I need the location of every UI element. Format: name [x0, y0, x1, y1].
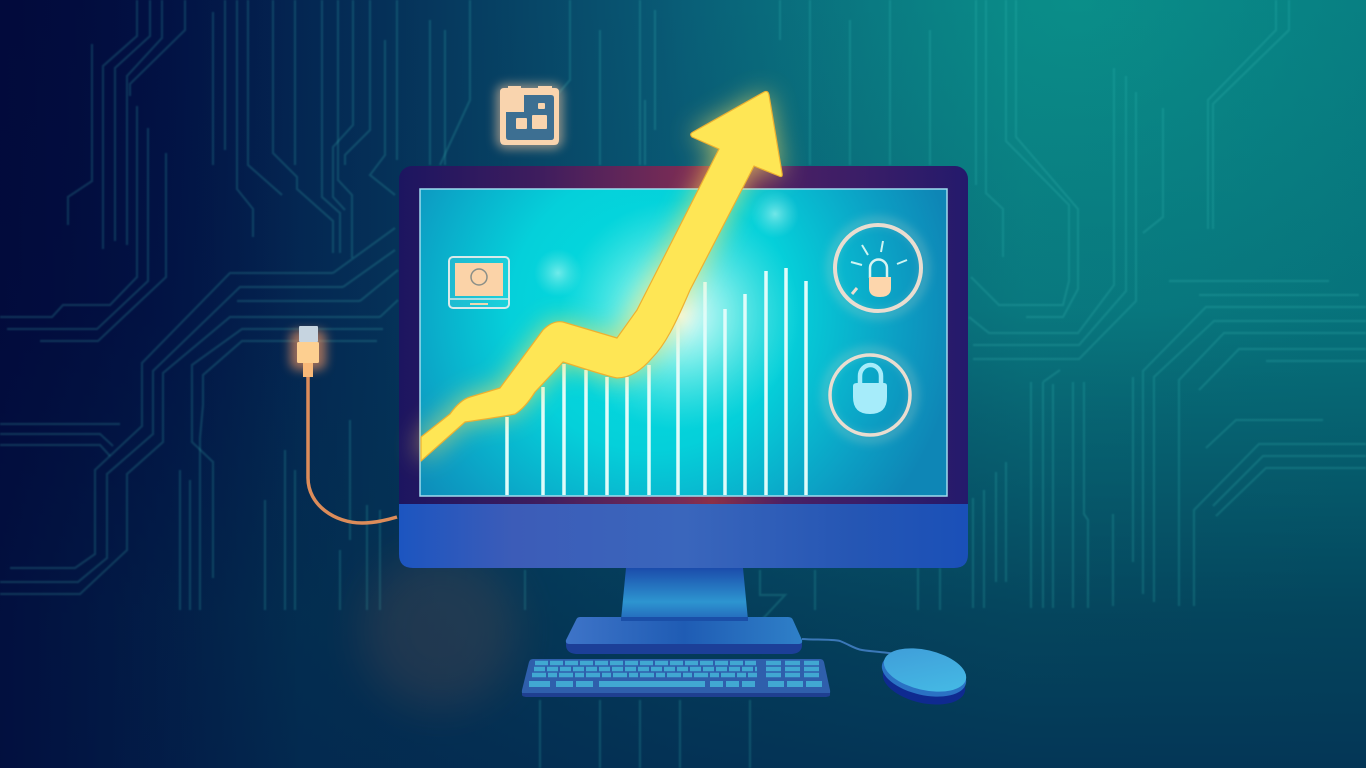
lens flare [362, 552, 518, 708]
icon: lightbulb lock [831, 221, 925, 315]
bar chart [507, 268, 806, 495]
monitor base [566, 617, 802, 654]
icon: calendar [496, 84, 563, 149]
icon: padlock [826, 351, 914, 439]
monitor chin [399, 504, 968, 568]
network cable [290, 326, 397, 523]
icon: laptop [449, 257, 509, 308]
growth arrow [421, 91, 782, 461]
monitor [399, 166, 968, 654]
keyboard [522, 659, 830, 697]
screen [420, 189, 947, 496]
mouse [802, 639, 971, 712]
monitor stand [621, 568, 748, 620]
screen glow [560, 200, 800, 430]
